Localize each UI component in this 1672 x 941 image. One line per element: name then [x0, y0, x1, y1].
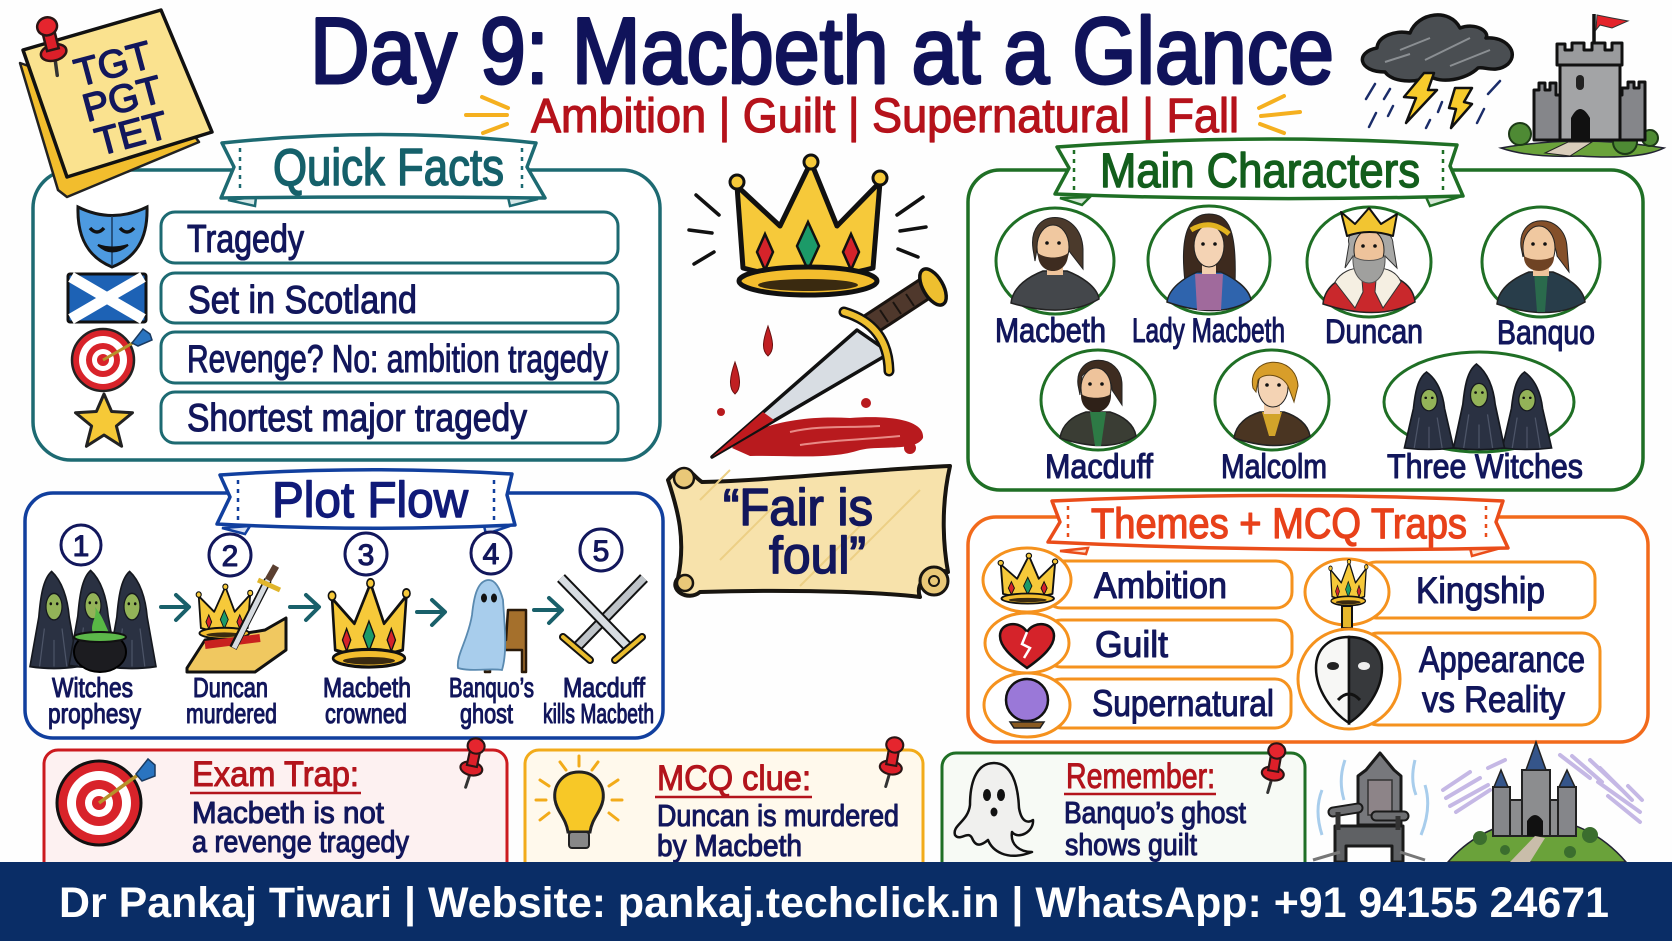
step 4: Banquo's ghost: Banquo’s [449, 672, 534, 703]
panel: themes and MCQ traps [968, 496, 1648, 742]
arrow 1 [161, 595, 189, 620]
icon: empty throne [1313, 753, 1428, 862]
arrow 2 [290, 595, 319, 620]
step 4: Banquo's ghost [449, 532, 534, 729]
step 5: Macduff kills Macbeth: kills Macbeth [543, 698, 654, 729]
fact row: scotland [161, 273, 618, 323]
quote scroll: “Fair is [723, 479, 873, 537]
icon: bloody dagger [712, 265, 952, 457]
step 3: Macbeth crowned: Macbeth [323, 672, 411, 703]
fact row: tragedy: Tragedy [187, 218, 304, 261]
callout: exam trap: Exam Trap: [192, 755, 359, 794]
step 5: Macduff kills Macbeth: 5 [593, 535, 609, 568]
quote scroll: foul” [769, 527, 866, 585]
icon: royal crown [689, 155, 926, 295]
icon: storm cloud [1362, 15, 1512, 128]
heading banner: themes: Themes + MCQ Traps [1091, 500, 1467, 548]
character names: Duncan [1325, 313, 1423, 351]
theme: kingship [1305, 559, 1595, 628]
sticky note: PGT [78, 68, 167, 131]
callout: exam trap: a revenge tragedy [192, 824, 409, 859]
portrait: Three Witches [1384, 352, 1574, 452]
theme: appearance vs reality: Appearance [1419, 639, 1585, 680]
character names: Banquo [1497, 314, 1595, 352]
icon: star [76, 394, 132, 446]
heading banner: plot flow [217, 470, 515, 534]
heading banner: quick facts [221, 134, 545, 206]
theme: ambition [983, 548, 1292, 612]
icon: pin [877, 736, 907, 789]
theme: guilt [985, 613, 1292, 673]
icon: castle top right [1501, 14, 1664, 157]
icon: scottish flag [68, 274, 146, 322]
theme: supernatural: Supernatural [1092, 683, 1274, 724]
callout: MCQ clue: by Macbeth [657, 828, 802, 863]
step 3: Macbeth crowned: 3 [358, 539, 374, 572]
character names [995, 312, 1595, 486]
quote scroll [668, 466, 950, 597]
character names: Malcolm [1221, 448, 1327, 486]
character names: Macduff [1045, 448, 1153, 486]
step 3: Macbeth crowned [323, 533, 411, 729]
icon: left sparks [466, 97, 508, 133]
theme: supernatural [984, 673, 1291, 737]
ghost eyes [983, 789, 1005, 816]
panel: plot flow [25, 470, 663, 738]
portrait: Lady Macbeth [1148, 206, 1270, 314]
step 2: Duncan murdered: murdered [186, 698, 277, 729]
icon: target [72, 329, 152, 391]
heading banner: main characters: Main Characters [1100, 145, 1420, 198]
portrait: Banquo [1482, 207, 1600, 317]
theme: guilt: Guilt [1095, 624, 1169, 665]
heading banner: plot flow: Plot Flow [272, 472, 469, 528]
callout: remember: shows guilt [1065, 827, 1197, 862]
arrow 3 [417, 600, 445, 625]
callout: exam trap: Macbeth is not [192, 795, 384, 830]
sticky note: TET [91, 104, 173, 164]
sticky note [20, 10, 212, 197]
character names: Three Witches [1387, 448, 1583, 486]
step 4: Banquo's ghost: ghost [460, 698, 513, 729]
fact row: shortest: Shortest major tragedy [187, 397, 527, 440]
icon: exam target [57, 759, 155, 845]
panel: main characters [968, 139, 1643, 490]
step 2: Duncan murdered: Duncan [193, 672, 268, 703]
icon: castle on hill [1443, 742, 1642, 862]
theme: ambition: Ambition [1094, 565, 1227, 606]
fact row: tragedy [161, 212, 618, 263]
callout: exam trap [44, 736, 507, 880]
callout: remember: Banquo’s ghost [1064, 795, 1246, 830]
icon: ghost [955, 763, 1033, 856]
footer bar: Dr Pankaj Tiwari | Website: pankaj.techclick.in | WhatsApp: +91 94155 24671 [59, 879, 1609, 927]
fact row: revenge [161, 332, 618, 383]
panel: quick facts [33, 134, 660, 460]
step 1: witches prophesy: 1 [73, 530, 89, 563]
step 1: witches prophesy [30, 525, 156, 729]
portrait: Macbeth [996, 208, 1114, 314]
subtitle: Ambition | Guilt | Supernatural | Fall [531, 90, 1239, 143]
heading banner: main characters [1055, 139, 1463, 206]
step 5: Macduff kills Macbeth [543, 529, 654, 729]
arrow 4 [534, 598, 562, 623]
sticky note: TGT [70, 34, 156, 95]
character names: Lady Macbeth [1132, 312, 1285, 350]
portrait: Malcolm [1215, 350, 1329, 450]
step 4: Banquo's ghost: 4 [483, 538, 499, 571]
step 3: Macbeth crowned: crowned [325, 698, 407, 729]
character names: Macbeth [995, 312, 1106, 350]
icon: light bulb [536, 756, 622, 848]
callout: remember [942, 742, 1305, 880]
icon: right sparks [1259, 96, 1300, 133]
icon: pin [1259, 742, 1289, 795]
title: Day 9: Macbeth at a Glance [310, 0, 1334, 103]
fact row: scotland: Set in Scotland [188, 279, 417, 322]
portrait: Duncan [1307, 207, 1431, 317]
callout: MCQ clue: MCQ clue: [657, 759, 811, 798]
callout: MCQ clue [525, 736, 923, 880]
portrait: Macduff [1041, 350, 1155, 450]
theme: appearance vs reality: vs Reality [1422, 679, 1565, 720]
callout: MCQ clue: Duncan is murdered [657, 798, 899, 833]
heading banner: quick facts: Quick Facts [273, 139, 504, 197]
callout: remember: Remember: [1066, 757, 1215, 796]
step 5: Macduff kills Macbeth: Macduff [563, 672, 645, 703]
icon: pin [456, 736, 489, 790]
step 1: witches prophesy: Witches [52, 672, 133, 703]
theme: kingship: Kingship [1416, 570, 1545, 611]
icon: mask [78, 207, 147, 267]
theme: appearance vs reality [1298, 629, 1600, 729]
fact row: revenge: Revenge? No: ambition tragedy [187, 338, 608, 381]
step 2: Duncan murdered: 2 [222, 540, 238, 573]
step 2: Duncan murdered [186, 534, 286, 729]
footer bar [0, 862, 1672, 941]
step 1: witches prophesy: prophesy [48, 698, 141, 729]
